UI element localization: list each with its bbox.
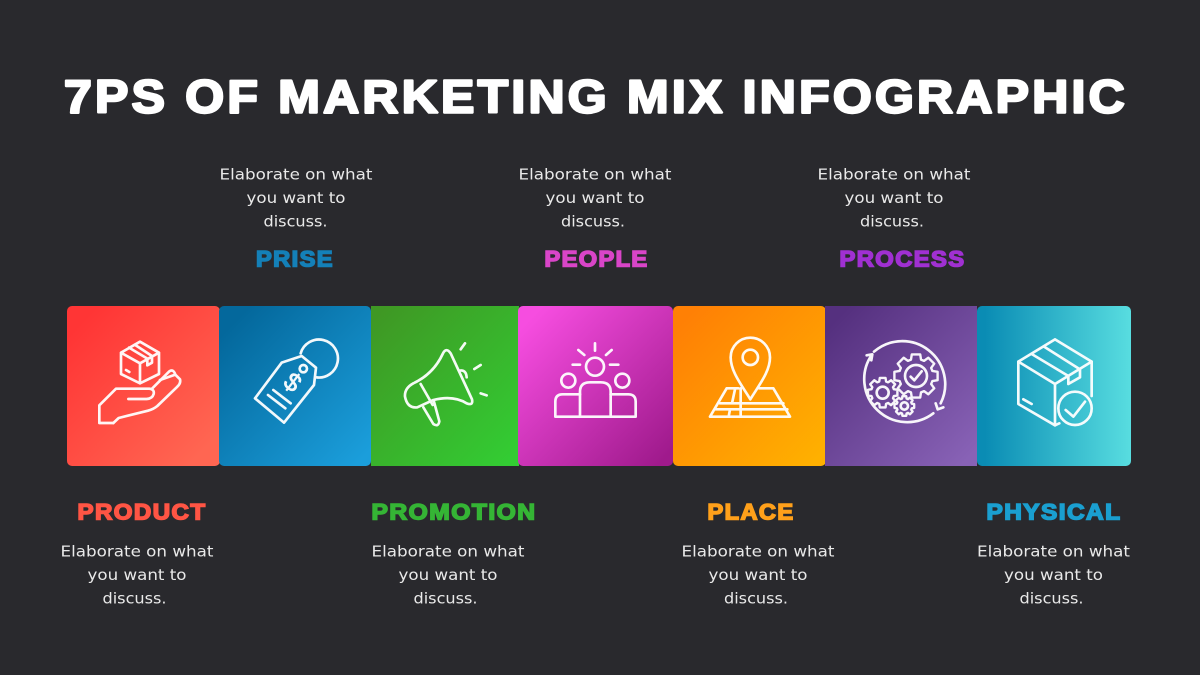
- icon: megaphone: [405, 343, 487, 425]
- icon: price tag: [255, 340, 338, 423]
- text block: people description: discuss.: [561, 212, 625, 230]
- text block: process description: discuss.: [860, 212, 924, 230]
- text block: product description: Elaborate on what: [60, 542, 214, 560]
- panel: process: [825, 306, 977, 466]
- icon: price tag: $: [278, 367, 307, 398]
- heading: prise: PRISE: [256, 246, 334, 272]
- text block: prise description: [220, 166, 372, 230]
- text block: product description: [60, 542, 214, 608]
- heading: promotion: PROMOTION: [372, 500, 536, 524]
- text block: people description: Elaborate on what: [518, 166, 672, 184]
- text block: product description: discuss.: [102, 590, 166, 608]
- text block: people description: [518, 166, 672, 230]
- icon: group of people: [555, 343, 636, 417]
- text block: people description: you want to: [546, 189, 644, 207]
- panel: people: [518, 306, 673, 466]
- text block: physical description: discuss.: [1020, 590, 1084, 608]
- panel: physical: [977, 306, 1131, 466]
- text block: prise description: discuss.: [264, 212, 328, 230]
- panel: prise: [219, 306, 371, 466]
- text block: physical description: [977, 542, 1130, 608]
- tile: people: [518, 306, 673, 466]
- text block: place description: [682, 542, 834, 608]
- tile: product: [67, 306, 220, 466]
- heading: people: PEOPLE: [544, 246, 648, 272]
- text block: prise description: you want to: [246, 189, 346, 207]
- text block: place description: discuss.: [724, 590, 788, 608]
- text block: process description: you want to: [844, 189, 944, 207]
- icon: map pin: [710, 338, 790, 417]
- text block: physical description: Elaborate on what: [977, 542, 1130, 560]
- heading: place: PLACE: [708, 500, 794, 524]
- icon: hand holding box: [99, 342, 180, 423]
- tile: prise: [219, 306, 371, 466]
- icon: box with check: [1018, 339, 1092, 425]
- heading: process: PROCESS: [840, 246, 966, 272]
- tile: physical: [977, 306, 1131, 466]
- text block: process description: [818, 166, 970, 230]
- heading: product: PRODUCT: [78, 500, 206, 524]
- heading: physical: PHYSICAL: [986, 500, 1122, 524]
- text block: promotion description: you want to: [398, 566, 498, 584]
- text block: process description: Elaborate on what: [818, 166, 970, 184]
- text block: prise description: Elaborate on what: [220, 166, 372, 184]
- icon: gears cycle: [864, 341, 945, 422]
- text block: promotion description: discuss.: [414, 590, 478, 608]
- panel: promotion: [371, 306, 519, 466]
- panel: product: [67, 306, 220, 466]
- panel: place: [673, 306, 826, 466]
- tile: place: [673, 306, 826, 466]
- tile: process: [825, 306, 977, 466]
- text block: promotion description: [372, 542, 524, 608]
- text block: place description: you want to: [708, 566, 808, 584]
- tile: promotion: [371, 306, 519, 466]
- text block: physical description: you want to: [1004, 566, 1103, 584]
- text block: promotion description: Elaborate on what: [372, 542, 524, 560]
- text block: product description: you want to: [88, 566, 186, 584]
- title: 7PS OF MARKETING MIX INFOGRAPHIC: [64, 70, 1128, 122]
- text block: place description: Elaborate on what: [682, 542, 834, 560]
